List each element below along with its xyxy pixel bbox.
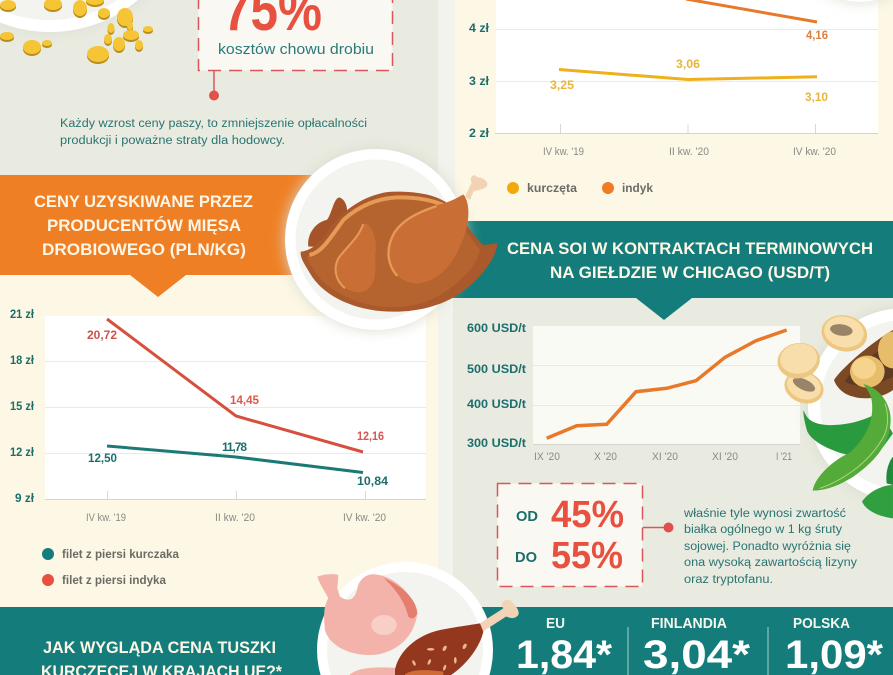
panel: producer prices chart: [0, 275, 438, 607]
y axis labels: 300 USD/t: [467, 438, 526, 450]
legend: indyk: [622, 183, 654, 195]
value labels: [87, 328, 388, 488]
legend: [42, 548, 180, 587]
panel: EU chicken carcass prices: [0, 562, 893, 675]
heading: producer prices: [0, 175, 320, 297]
callout: protein share: [498, 484, 642, 586]
value labels: [550, 28, 828, 104]
x axis labels: IX '20: [534, 451, 560, 463]
heading: producer prices: PRODUCENTÓW MIĘSA: [47, 216, 241, 235]
icon: roast chicken plate: [285, 149, 497, 330]
panel: feed costs: [0, 0, 438, 176]
line: chickens: [559, 70, 817, 80]
axis labels: [469, 23, 490, 140]
x axis labels: X '20: [594, 451, 617, 463]
stat: EU: [516, 615, 612, 675]
icon: soy plate: [775, 308, 893, 518]
value labels: 4,16: [806, 28, 828, 42]
axis labels: 4 zł: [469, 23, 490, 35]
y axis labels: 9 zł: [15, 493, 35, 505]
legend: filet z piersi kurczaka: [62, 549, 180, 561]
heading: JAK WYGLĄDA CENA TUSZKI: [43, 638, 276, 657]
x axis labels: [543, 146, 836, 158]
soy beans and pods: [775, 311, 893, 518]
axis labels: 2 zł: [469, 128, 490, 140]
value labels: 14,45: [230, 393, 259, 407]
stat: Finland: FINLANDIA: [651, 615, 727, 632]
callout: protein share: DO: [515, 549, 537, 566]
line: soy price: [547, 330, 787, 438]
legend: kurczęta: [527, 183, 578, 195]
icon: raw meat plate: [317, 562, 519, 675]
value labels: 10,84: [357, 474, 388, 488]
x axis labels: [534, 451, 792, 463]
roast chicken: [301, 175, 497, 312]
x axis labels: IV kw. '20: [793, 146, 836, 158]
text block: feed note: [60, 118, 367, 147]
callout: protein share: 55%: [551, 535, 623, 577]
y axis labels: [10, 309, 35, 505]
y axis labels: [467, 323, 526, 450]
x axis labels: II kw. '20: [215, 512, 255, 524]
text block: feed note: Każdy wzrost ceny paszy, to zmniejszenie opłacalności: [60, 118, 367, 130]
stat: Poland: POLSKA: [793, 615, 850, 632]
connector dot: [643, 522, 674, 532]
heading: producer prices: DROBIOWEGO (PLN/KG): [42, 240, 246, 259]
value labels: 12,16: [357, 429, 384, 443]
meat pieces: [317, 574, 519, 675]
y axis labels: 18 zł: [10, 355, 35, 367]
heading: producer prices: CENY UZYSKIWANE PRZEZ: [34, 192, 253, 211]
legend: [507, 182, 654, 195]
callout: 75%: kosztów chowu drobiu: [218, 41, 374, 58]
heading: soy price: CENA SOI W KONTRAKTACH TERMINOWYCH: [507, 239, 873, 258]
line: turkey fillet: [107, 319, 363, 452]
axis labels: 3 zł: [469, 76, 490, 88]
connector dot: [209, 70, 219, 100]
heading: [41, 638, 282, 675]
x axis labels: IV kw. '19: [543, 146, 584, 158]
x axis labels: IV kw. '20: [343, 512, 386, 524]
x axis labels: XI '20: [652, 451, 678, 463]
text block: protein note: właśnie tyle wynosi zwartość: [683, 508, 846, 520]
x axis labels: XI '20: [712, 451, 738, 463]
value labels: 11,78: [222, 440, 247, 454]
x axis labels: [86, 512, 386, 524]
text block: protein note: ona wysoką zawartością lizyny: [684, 557, 857, 569]
value labels: 3,25: [550, 78, 574, 92]
stat: EU: EU: [546, 615, 565, 632]
y axis labels: 15 zł: [10, 401, 35, 413]
text block: protein note: [683, 508, 857, 586]
value labels: 3,06: [676, 57, 700, 71]
value labels: 3,10: [805, 90, 828, 104]
y axis labels: 400 USD/t: [467, 399, 526, 411]
stat: Finland: [643, 615, 750, 675]
plate edge top right: [798, 0, 893, 2]
x axis labels: IV kw. '19: [86, 512, 126, 524]
callout: protein share: 45%: [551, 494, 624, 536]
text block: protein note: sojowej. Ponadto wyróżnia się: [684, 541, 851, 553]
icon: plate of grain: [0, 0, 187, 64]
text block: protein note: białka ogólnego w 1 kg śruty: [684, 524, 842, 536]
x axis labels: I '21: [776, 451, 792, 463]
text block: protein note: oraz tryptofanu.: [684, 574, 773, 586]
callout: protein share: OD: [516, 508, 538, 525]
line: chicken fillet: [107, 446, 363, 472]
value labels: 20,72: [87, 328, 117, 342]
panel: live prices chart: [455, 0, 893, 222]
y axis labels: 500 USD/t: [467, 364, 526, 376]
stat: Poland: [785, 615, 883, 675]
panel: soy price chart: [453, 298, 893, 607]
legend: filet z piersi indyka: [62, 575, 167, 587]
heading: soy price: NA GIEŁDZIE W CHICAGO (USD/T): [550, 263, 830, 282]
y axis labels: 12 zł: [10, 447, 35, 459]
line: turkey: [686, 0, 817, 22]
heading: soy price: [453, 221, 893, 320]
y axis labels: 600 USD/t: [467, 323, 526, 335]
x axis labels: II kw. '20: [669, 146, 709, 158]
value labels: 12,50: [88, 451, 117, 465]
y axis labels: 21 zł: [10, 309, 35, 321]
callout: 75%: [198, 0, 392, 70]
text block: feed note: produkcji i poważne straty dla hodowcy.: [60, 135, 285, 147]
